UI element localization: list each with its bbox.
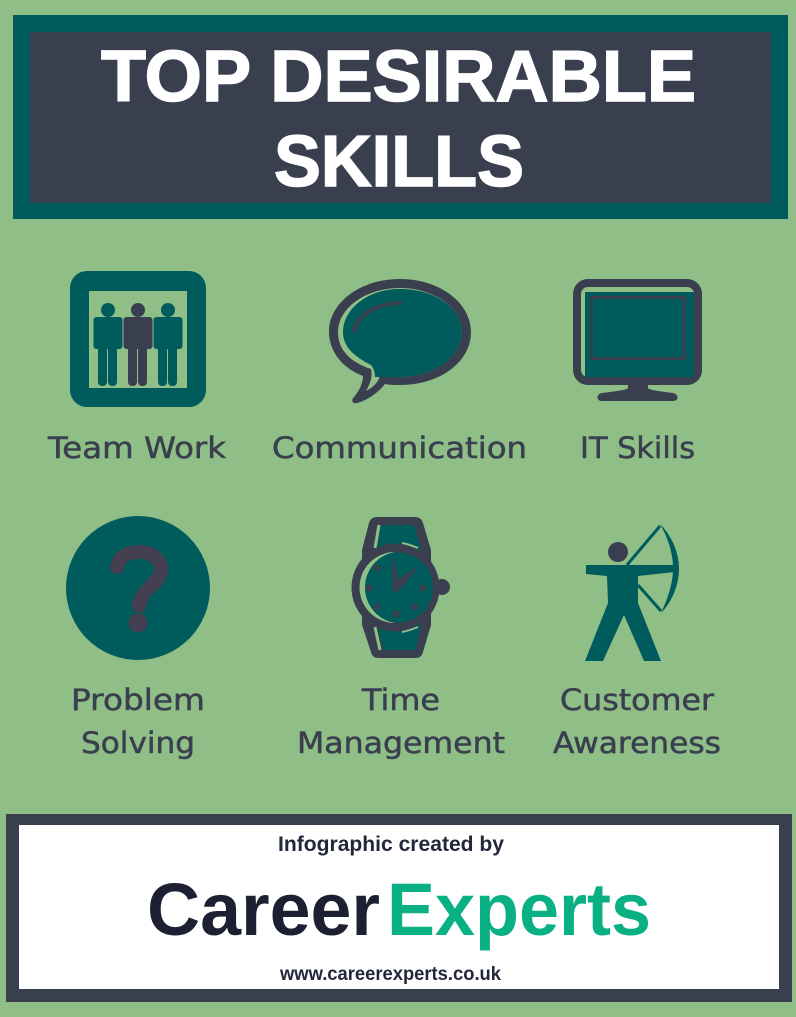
icon: team work <box>70 271 206 407</box>
website url: www.careerexperts.co.uk <box>279 964 501 985</box>
label: time management: Management <box>297 726 505 760</box>
icon: question mark <box>66 516 210 660</box>
label: time management: Time <box>361 683 440 717</box>
title: SKILLS <box>274 122 524 202</box>
label: it skills: IT Skills <box>580 431 695 465</box>
icon: computer monitor <box>577 283 698 401</box>
logo: Career Experts: Experts <box>387 868 651 951</box>
label: customer awareness <box>553 683 721 760</box>
title <box>101 37 696 202</box>
title banner <box>13 15 788 219</box>
label: communication: Communication <box>272 431 527 465</box>
icon: speech bubble <box>329 279 471 403</box>
label: customer awareness: Customer <box>560 683 714 717</box>
label: time management <box>297 683 505 760</box>
panel: credit footer <box>6 814 792 1002</box>
logo: Career Experts: Career <box>147 868 380 951</box>
label: team work: Team Work <box>47 431 226 465</box>
label: problem solving: Problem <box>71 683 205 717</box>
icon: wristwatch <box>352 517 450 658</box>
label: customer awareness: Awareness <box>553 726 721 760</box>
title: TOP DESIRABLE <box>101 37 696 117</box>
icon: archer <box>585 524 679 661</box>
logo: Career Experts <box>147 868 651 951</box>
label: problem solving: Solving <box>81 726 195 760</box>
label: problem solving <box>71 683 205 760</box>
credit text: Infographic created by <box>278 833 504 856</box>
